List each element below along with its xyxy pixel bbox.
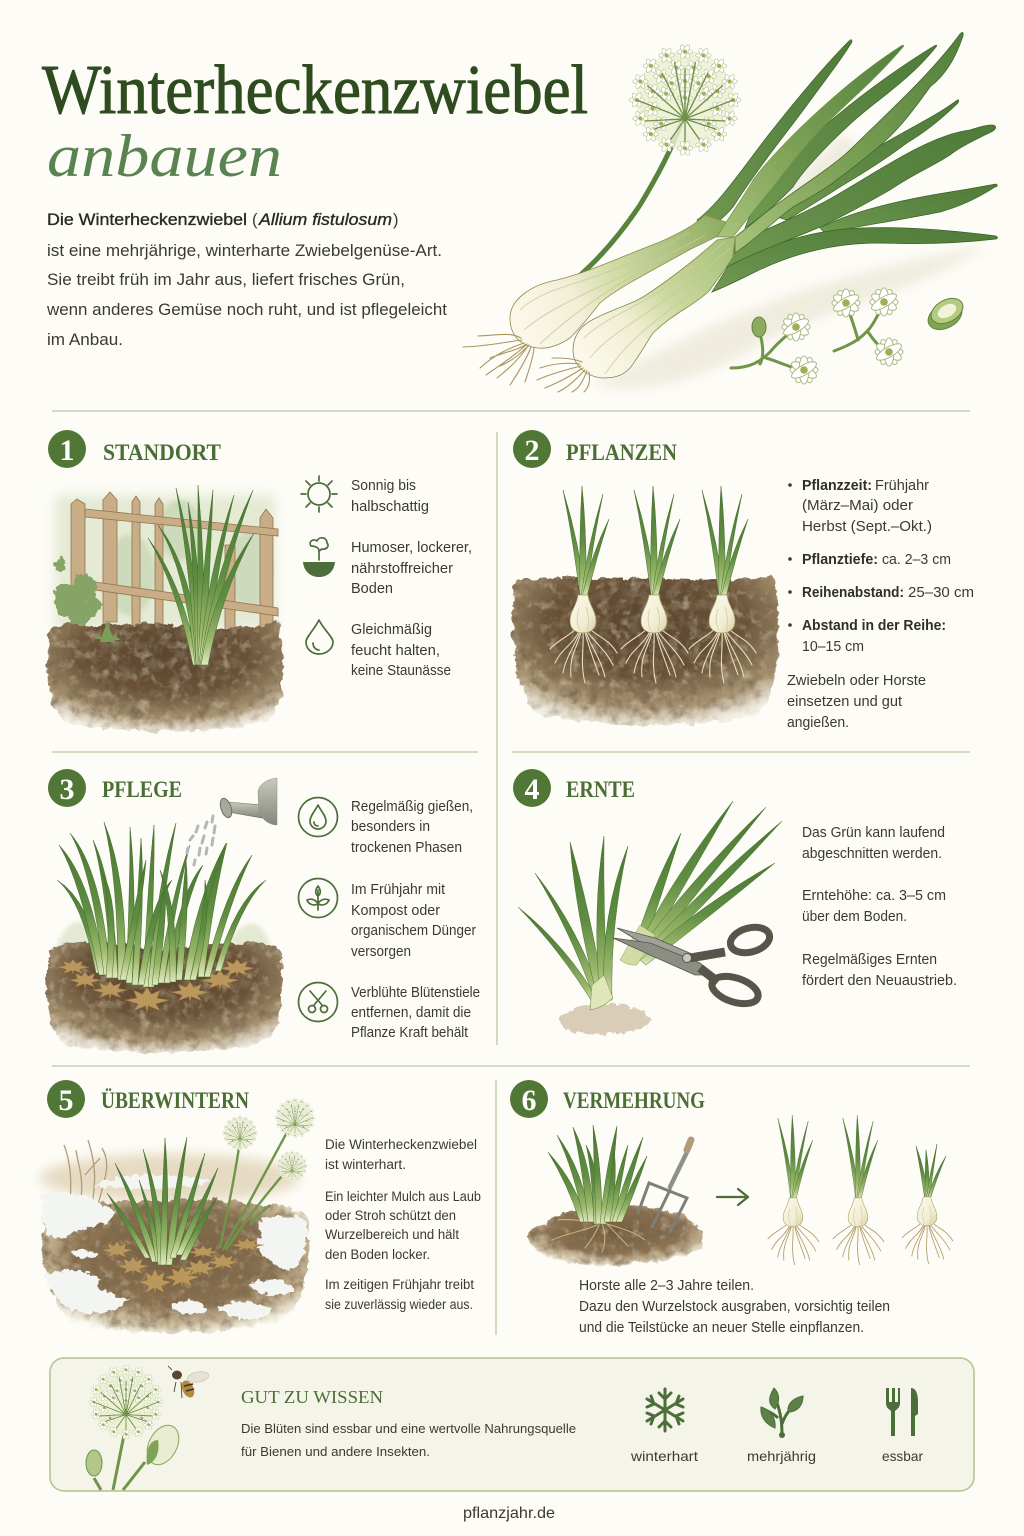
icon: drop in circle [298, 798, 338, 836]
text: bluetenstiele: Verblühte Blütenstiele [351, 985, 480, 1001]
footer: source: pflanzjahr.de [463, 1505, 555, 1522]
text: giessen: trockenen Phasen [351, 840, 462, 856]
text: winterhart: den Boden locker. [325, 1247, 430, 1262]
planting note: angießen. [787, 715, 849, 731]
illustration: flowers [86, 1364, 185, 1490]
text: winterhart: Die Winterheckenzwiebel [325, 1137, 477, 1152]
icon: leaf in circle [298, 878, 338, 918]
panel: ueberwintern [40, 1080, 481, 1332]
bush [54, 558, 101, 624]
text: bluetenstiele: Pflanze Kraft behält [351, 1025, 468, 1041]
arrow [717, 1189, 748, 1205]
icon: bee [168, 1366, 210, 1399]
text: boden: Boden [351, 581, 393, 597]
intro text: im Anbau. [47, 331, 123, 349]
icon: scissors in circle [298, 982, 338, 1022]
illustration: winter onions with flower [463, 32, 998, 392]
panel: pflege [46, 769, 480, 1053]
text: winterhart: Wurzelbereich und hält [325, 1227, 459, 1242]
intro text: Die Winterheckenzwiebel [47, 211, 247, 229]
snow patches [42, 1175, 307, 1320]
heading: gut zu wissen: GUT ZU WISSEN [241, 1387, 383, 1407]
watering can [218, 778, 277, 825]
text: duengen: organischem Dünger [351, 923, 476, 939]
heading: ernte: ERNTE [566, 777, 635, 802]
small flower cluster left [731, 307, 823, 390]
text: duengen [351, 882, 476, 960]
soil crumbs [559, 1003, 650, 1034]
icon: water drop [306, 620, 333, 654]
intro text [46, 211, 447, 349]
text: vermehrung: und die Teilstücke an neuer Stelle einpflanzen. [579, 1320, 864, 1336]
text: feuchtigkeit [351, 622, 451, 679]
text: sonnig: Sonnig bis [351, 478, 416, 494]
text: boden: Humoser, lockerer, [351, 540, 472, 556]
planting facts list: ca. 2–3 cm [882, 552, 951, 568]
text: bluetenstiele: entfernen, damit die [351, 1005, 471, 1021]
dead leaves [56, 959, 255, 1014]
number badge 3 [48, 769, 86, 807]
text: vermehrung [579, 1278, 890, 1336]
text: ernte: über dem Boden. [802, 909, 907, 925]
heading: pflege: PFLEGE [102, 777, 182, 802]
strip of upper leaf [717, 45, 904, 237]
text: giessen: Regelmäßig gießen, [351, 799, 473, 815]
intro text: ist eine mehrjährige, winterharte Zwiebelgenüse-Art. [47, 242, 442, 260]
illustration: dug up clump and fork [528, 1125, 703, 1265]
illustration: three plants in soil [512, 486, 778, 725]
leaves [697, 32, 998, 292]
planting note: Zwiebeln oder Horste [787, 673, 926, 689]
planting facts list: (März–Mai) oder [802, 498, 913, 514]
number badge 4 [513, 769, 551, 807]
heading: standort: STANDORT [103, 440, 221, 465]
panel: pflanzen [512, 430, 974, 731]
intro text: wenn anderes Gemüse noch ruht, und ist pflegeleicht [46, 301, 447, 319]
flower stem [577, 118, 683, 278]
text: winterhart: Im zeitigen Frühjahr treibt [325, 1277, 474, 1292]
text: blueten [241, 1421, 576, 1459]
planting facts list: Abstand in der Reihe: [802, 618, 946, 634]
flower head [629, 44, 741, 156]
number badge 5: 5 [58, 1084, 74, 1117]
text: duengen: Kompost oder [351, 903, 440, 919]
text: sonnig [351, 478, 429, 515]
illustration: clump with watering can [46, 778, 282, 1053]
panel: ernte [513, 769, 957, 1034]
scissors [613, 923, 772, 1009]
planting facts list: 10–15 cm [802, 639, 864, 655]
left onion [463, 215, 735, 385]
text: winterhart: oder Stroh schützt den [325, 1208, 456, 1223]
planting facts list: 25–30 cm [908, 585, 974, 601]
text: feuchtigkeit: feucht halten, [351, 643, 440, 659]
panel: gut zu wissen [50, 1358, 974, 1491]
planting facts list: Pflanzzeit: [802, 478, 872, 494]
number badge 2 [513, 430, 551, 468]
text: ernte: Erntehöhe: ca. 3–5 cm [802, 888, 946, 904]
text: ernte: Regelmäßiges Ernten [802, 952, 937, 968]
text: giessen: besonders in [351, 819, 430, 835]
heading: ueberwintern: ÜBERWINTERN [101, 1088, 249, 1113]
intro text: Allium fistulosum [258, 211, 392, 229]
text: feuchtigkeit: keine Staunässe [351, 663, 451, 679]
planting facts list: Frühjahr [875, 478, 929, 494]
subtitle: anbauen: anbauen [47, 123, 282, 189]
text: boden: nährstoffreicher [351, 561, 453, 577]
text: duengen: Im Frühjahr mit [351, 882, 445, 898]
number badge 1: 1 [60, 434, 74, 467]
planting note [787, 673, 926, 731]
planting facts list: Herbst (Sept.–Okt.) [802, 519, 932, 535]
text: feuchtigkeit: Gleichmäßig [351, 622, 432, 638]
text: blueten: für Bienen und andere Insekten. [241, 1444, 430, 1459]
number badge 6: 6 [522, 1084, 536, 1117]
icon: fork and knife [886, 1388, 918, 1436]
mulch leaves [100, 1238, 264, 1297]
text: sonnig: halbschattig [351, 499, 429, 515]
dividers [52, 411, 970, 1335]
text: ernte: Das Grün kann laufend [802, 825, 945, 841]
flower heads [275, 1098, 315, 1138]
planting facts list [788, 478, 974, 655]
illustration: plant in winter mulch [40, 1098, 315, 1332]
text: ernte: abgeschnitten werden. [802, 846, 942, 862]
heading: vermehrung: VERMEHRUNG [563, 1088, 705, 1113]
intro text: ) [393, 211, 398, 229]
illustration: harvest with scissors [518, 801, 782, 1034]
number badge 2: 2 [524, 434, 540, 467]
icon: seedling in soil [303, 538, 335, 577]
water drops [187, 816, 215, 865]
icon: sprout [761, 1388, 803, 1438]
text: giessen [351, 799, 473, 856]
onion ring [923, 293, 967, 335]
flower stems [220, 1123, 292, 1250]
panel: vermehrung [510, 1080, 953, 1336]
small flower cluster right [827, 282, 908, 372]
icon: sun [301, 476, 337, 512]
number badge 6 [510, 1080, 548, 1118]
intro text: ( [252, 211, 258, 229]
text: winterhart: ist winterhart. [325, 1157, 406, 1172]
label: mehrjaehrig: mehrjährig [747, 1448, 816, 1464]
planting facts list: Pflanztiefe: [802, 552, 878, 568]
text: vermehrung: Dazu den Wurzelstock ausgraben, vorsichtig teilen [579, 1299, 890, 1315]
text: winterhart: Ein leichter Mulch aus Laub [325, 1189, 481, 1204]
intro text: Sie treibt früh im Jahr aus, liefert frisches Grün, [47, 271, 405, 289]
text: ernte: fördert den Neuaustrieb. [802, 973, 957, 989]
garden fork [638, 1140, 691, 1232]
icon: snowflake [647, 1389, 683, 1431]
text: winterhart [325, 1137, 481, 1312]
number badge 4: 4 [524, 773, 540, 806]
illustration: divided plants [768, 1115, 953, 1265]
text: winterhart: sie zuverlässig wieder aus. [325, 1297, 473, 1312]
heading: pflanzen: PFLANZEN [566, 440, 677, 465]
text: duengen: versorgen [351, 944, 411, 960]
title: Winterheckenzwiebel [42, 52, 588, 129]
text: boden [351, 540, 472, 597]
text: bluetenstiele [351, 985, 480, 1041]
label: essbar: essbar [882, 1448, 923, 1464]
text: ernte [802, 825, 957, 989]
number badge 5 [47, 1080, 85, 1118]
panel: standort [47, 430, 472, 731]
planting note: einsetzen und gut [787, 694, 902, 710]
text: vermehrung: Horste alle 2–3 Jahre teilen. [579, 1278, 754, 1294]
illustration: fence and plant in soil [47, 485, 283, 731]
label: winterhart: winterhart [630, 1448, 698, 1464]
text: blueten: Die Blüten sind essbar und eine wertvolle Nahrungsquelle [241, 1421, 576, 1436]
planting facts list: Reihenabstand: [802, 585, 904, 601]
number badge 1 [48, 430, 86, 468]
right onion [537, 237, 735, 392]
number badge 3: 3 [60, 773, 74, 806]
